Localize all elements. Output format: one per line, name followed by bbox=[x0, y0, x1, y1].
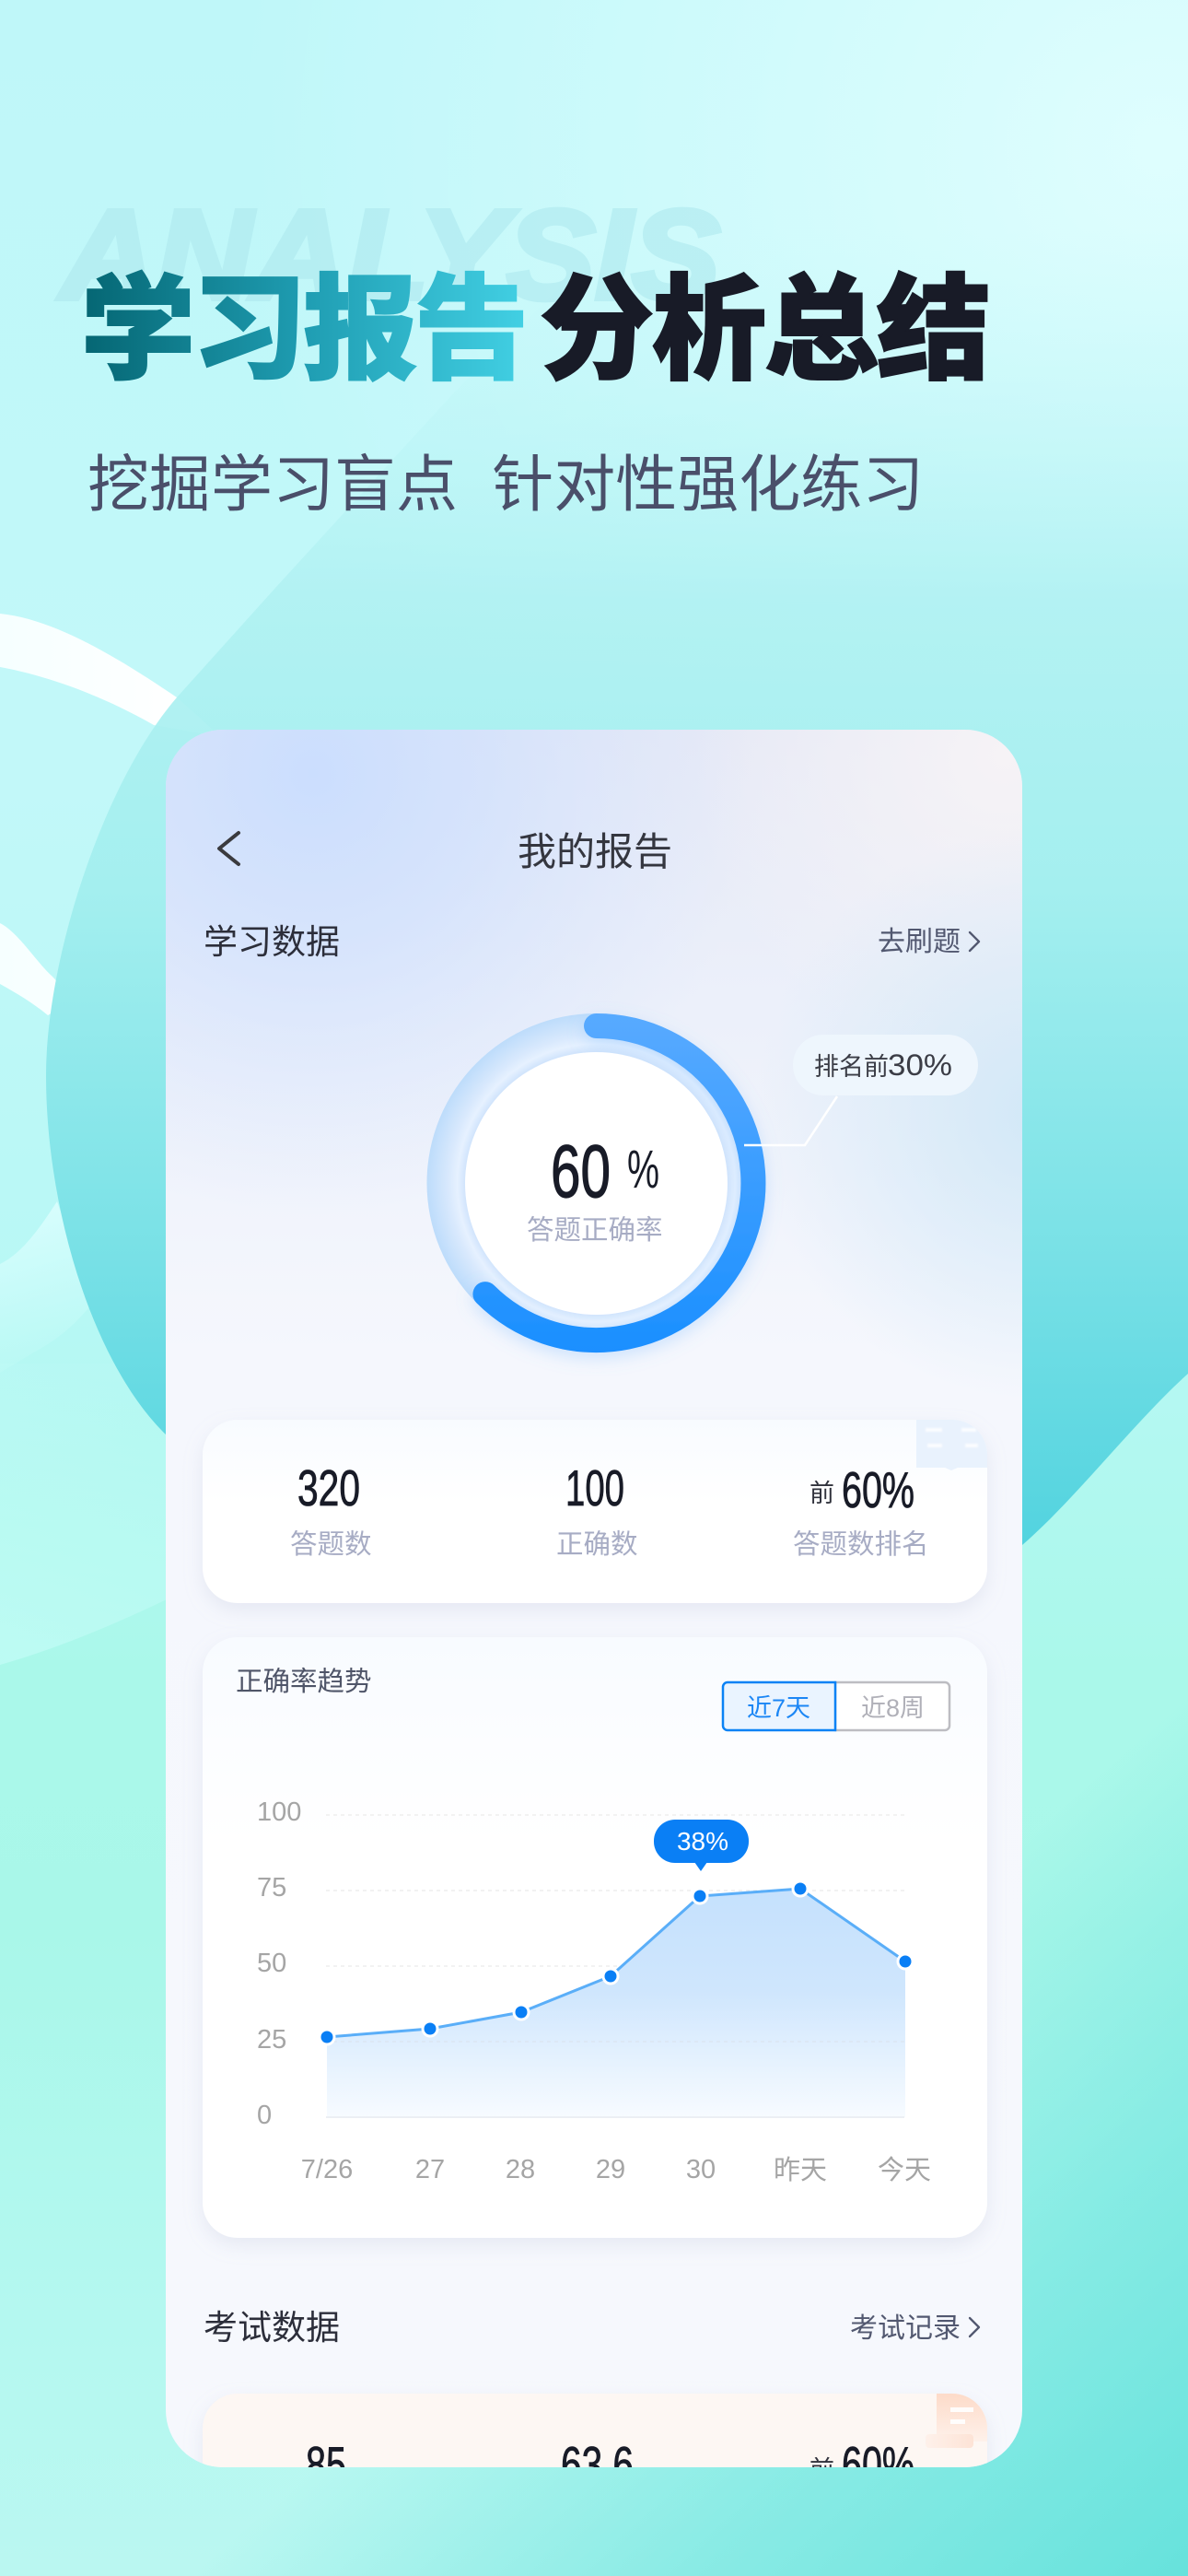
stat: rank: 答题数排名 bbox=[793, 1529, 929, 1560]
x axis labels: 30 bbox=[686, 2155, 716, 2184]
tabs: period toggle: 近7天 bbox=[747, 1694, 810, 1722]
link: go practice: 去刷题 bbox=[878, 927, 961, 957]
y axis labels: 0 bbox=[257, 2101, 272, 2130]
x axis labels: 昨天 bbox=[774, 2155, 827, 2185]
panel: study stats bbox=[203, 1420, 987, 1603]
title bbox=[81, 267, 991, 394]
title: 分析总结 bbox=[540, 267, 991, 394]
tabs: period toggle: 近8周 bbox=[861, 1694, 925, 1722]
heading: exam data: 考试数据 bbox=[204, 2309, 340, 2347]
x axis labels: 7/26 bbox=[301, 2155, 353, 2184]
x axis labels: 28 bbox=[506, 2155, 535, 2184]
callout: rank top 30% bbox=[744, 1035, 978, 1145]
exam values: 前 bbox=[809, 2456, 834, 2484]
tabs: period toggle bbox=[723, 1682, 949, 1730]
link: go practice bbox=[879, 927, 980, 953]
exam values: 85 bbox=[306, 2436, 346, 2493]
teal background blob bbox=[46, 55, 1188, 1658]
panel: exam stats bbox=[203, 2394, 987, 2467]
stat: rank: 前 bbox=[809, 1480, 834, 1507]
callout: rank top 30%: 30% bbox=[888, 1048, 952, 1082]
area fill bbox=[327, 1889, 905, 2117]
panel: accuracy trend bbox=[203, 1637, 987, 2238]
y axis labels: 50 bbox=[257, 1949, 286, 1978]
ring chart: accuracy 60% bbox=[427, 1013, 766, 1352]
stat: answered: 320 bbox=[297, 1459, 360, 1516]
screen background bbox=[166, 730, 1022, 2467]
callout: rank top 30%: 排名前 bbox=[814, 1053, 889, 1081]
icon: back chevron bbox=[219, 833, 239, 864]
ring value: % bbox=[627, 1140, 659, 1200]
stat: answered: 答题数 bbox=[290, 1529, 372, 1560]
ring value bbox=[553, 1144, 658, 1199]
ring label: 答题正确率 bbox=[527, 1215, 663, 1246]
icon: exam corner decoration bbox=[926, 2394, 987, 2448]
y axis labels bbox=[257, 1797, 301, 2130]
line chart bbox=[257, 1797, 931, 2185]
stat: rank bbox=[794, 1471, 925, 1556]
y axis labels: 100 bbox=[257, 1797, 301, 1827]
x axis labels: 今天 bbox=[878, 2155, 931, 2185]
stat: correct bbox=[558, 1469, 637, 1556]
tooltip: 38% bbox=[654, 1820, 749, 1871]
data points bbox=[320, 1881, 913, 2044]
y axis labels: 75 bbox=[257, 1873, 286, 1903]
screen title: 我的报告 bbox=[518, 830, 672, 873]
icon: card corner decoration bbox=[916, 1420, 987, 1470]
subtitle: 挖掘学习盲点 针对性强化练习 bbox=[87, 451, 924, 520]
decorative white arcs bbox=[0, 614, 221, 1015]
x axis labels bbox=[302, 2156, 930, 2182]
heading: study data: 学习数据 bbox=[204, 923, 340, 961]
exam values: 63.6 bbox=[561, 2436, 634, 2493]
panel: phone screen bbox=[166, 730, 1022, 2576]
stat: rank: 60% bbox=[842, 1461, 914, 1518]
exam values bbox=[308, 2446, 914, 2467]
stat: answered bbox=[291, 1469, 370, 1556]
chart heading: 正确率趋势 bbox=[236, 1667, 372, 1697]
stat: correct: 100 bbox=[565, 1459, 624, 1516]
ring value: 60 bbox=[551, 1130, 611, 1213]
tooltip: 38%: 38% bbox=[677, 1827, 728, 1856]
ghost word ANALYSIS: ANALYSIS bbox=[58, 184, 720, 326]
x axis labels: 29 bbox=[596, 2155, 625, 2184]
stat: correct: 正确数 bbox=[556, 1529, 638, 1560]
y axis labels: 25 bbox=[257, 2025, 286, 2055]
x axis labels: 27 bbox=[415, 2155, 445, 2184]
exam values: 60% bbox=[842, 2436, 914, 2493]
link: exam records: 考试记录 bbox=[850, 2313, 961, 2344]
title: 学习报告 bbox=[81, 267, 529, 394]
trend line bbox=[327, 1889, 905, 2037]
